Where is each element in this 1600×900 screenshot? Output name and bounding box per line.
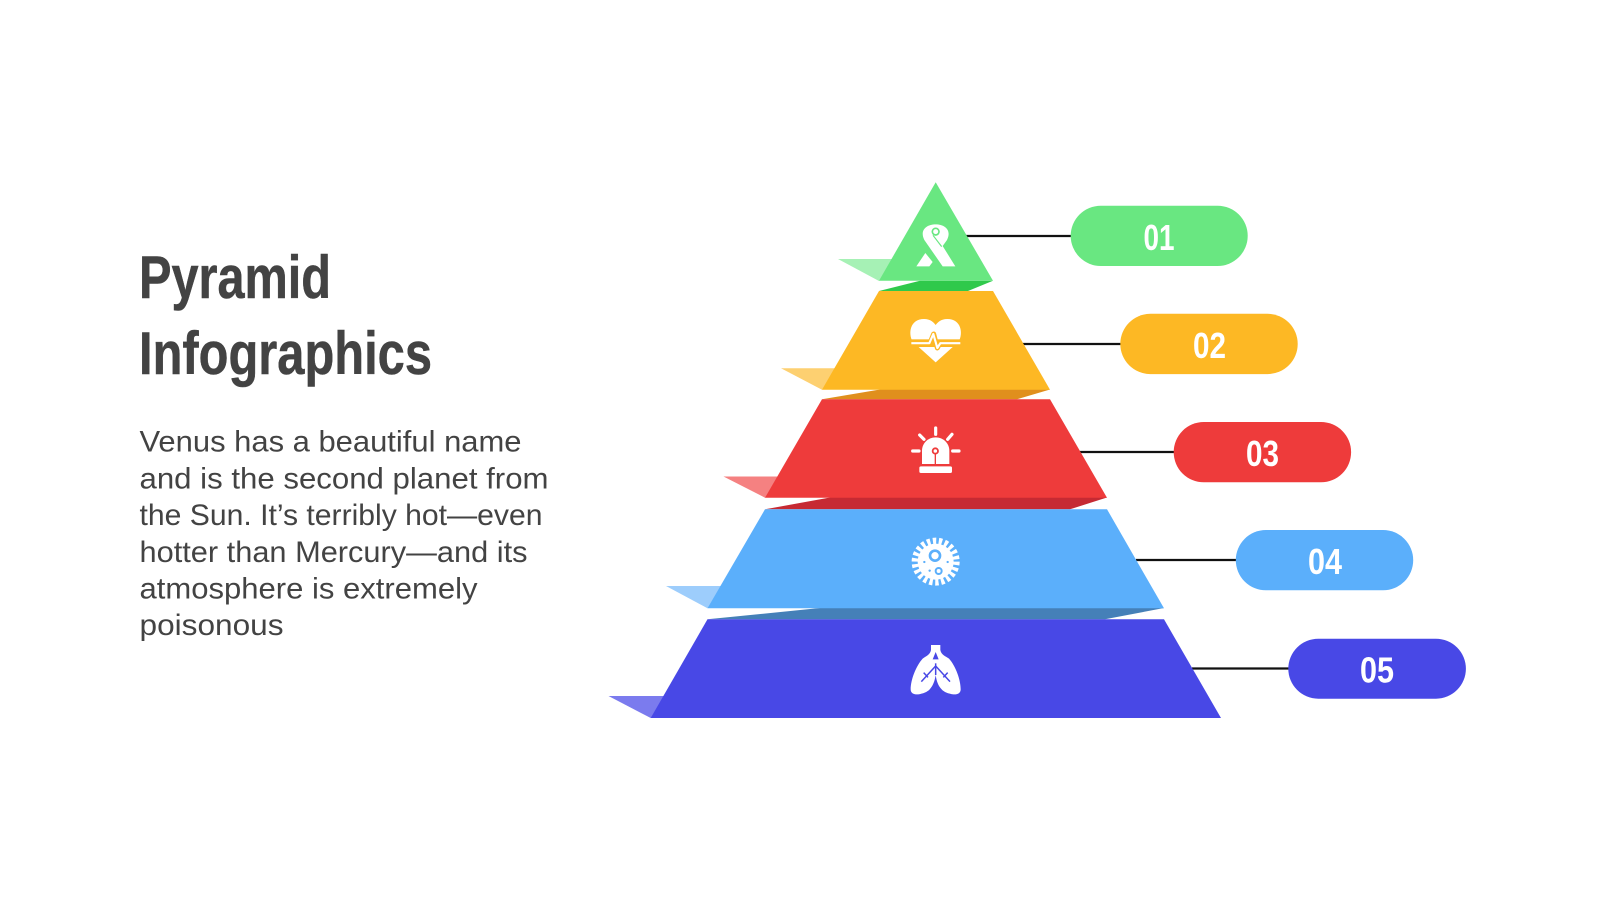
label pill 03: 03 bbox=[1246, 433, 1279, 474]
label pill 01: 01 bbox=[1144, 217, 1174, 258]
tier 5: indigo bbox=[608, 619, 1221, 718]
body text block: poisonous bbox=[140, 609, 284, 642]
tier 3: red bbox=[724, 399, 1107, 509]
body text block bbox=[140, 426, 548, 642]
icon: heart with pulse bbox=[908, 319, 963, 362]
body text block: hotter than Mercury—and its bbox=[140, 536, 528, 569]
label pill 01 bbox=[1071, 206, 1248, 266]
title: Infographics bbox=[139, 320, 432, 387]
label pill 02: 02 bbox=[1193, 325, 1226, 366]
tier 4: blue bbox=[666, 509, 1164, 619]
icon: alarm siren bbox=[913, 428, 959, 473]
label pill 05: 05 bbox=[1360, 650, 1394, 690]
label pill 05 bbox=[1288, 639, 1466, 699]
tier 2: yellow bbox=[781, 291, 1050, 399]
label pill 04: 04 bbox=[1308, 541, 1342, 582]
body text block: the Sun. It’s terribly hot—even bbox=[140, 499, 542, 532]
tier 1: green bbox=[838, 182, 993, 291]
title bbox=[139, 244, 432, 387]
icon: ribbon bbox=[916, 224, 955, 266]
body text block: Venus has a beautiful name bbox=[140, 426, 522, 459]
label pill 02 bbox=[1120, 314, 1298, 374]
connector lines bbox=[966, 236, 1290, 668]
label pill 03 bbox=[1174, 422, 1351, 482]
title: Pyramid bbox=[139, 244, 331, 311]
body text block: atmosphere is extremely bbox=[140, 572, 478, 606]
icon: lungs bbox=[911, 645, 961, 694]
body text block: and is the second planet from bbox=[140, 462, 548, 495]
icon: virus bbox=[915, 541, 956, 582]
label pill 04 bbox=[1236, 530, 1413, 590]
